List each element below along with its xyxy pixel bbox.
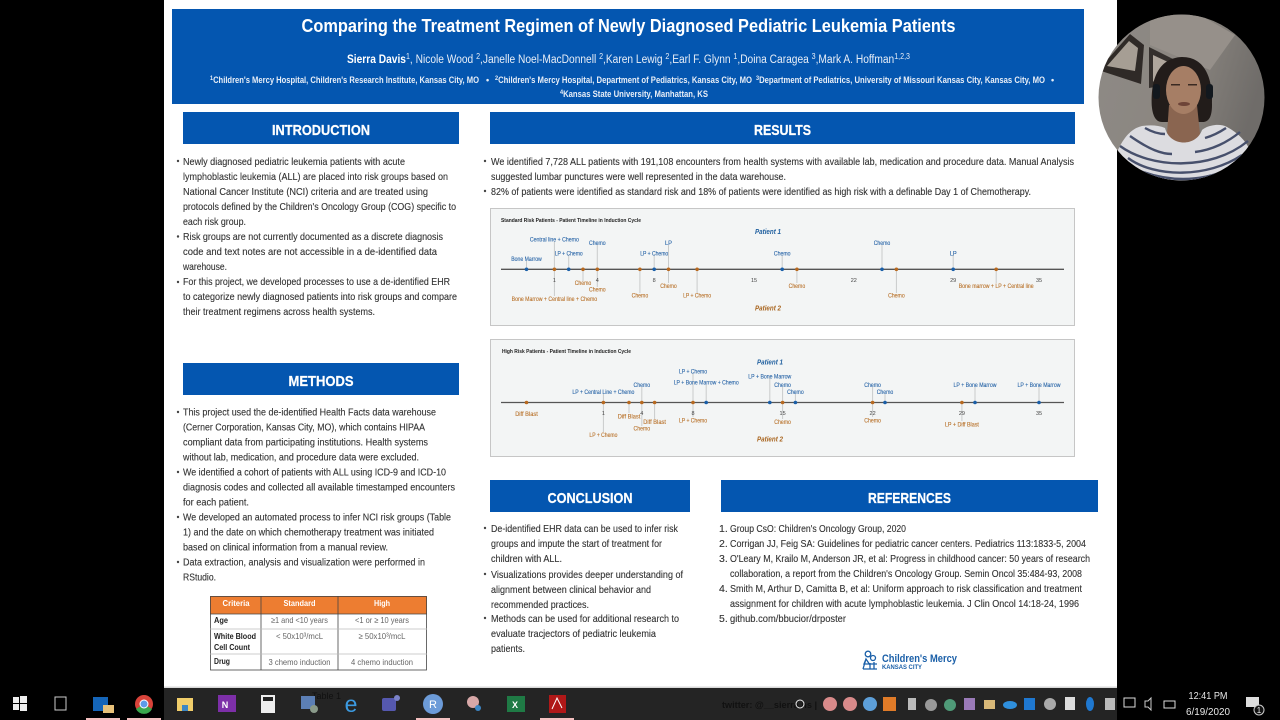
- introduction text: warehouse.: [182, 261, 227, 273]
- chart: high risk patient timeline: Chemo: [634, 427, 651, 433]
- authors: Sierra Davis: [347, 54, 406, 66]
- chart: standard risk patient timeline: LP + Chemo: [683, 294, 712, 300]
- heading: introduction: [183, 112, 459, 144]
- authors: ,Doina Caragea: [737, 54, 812, 66]
- chart: high risk patient timeline: LP + Chemo: [679, 369, 708, 375]
- chart: standard risk patient timeline: Bone marrow + LP + Central line: [959, 284, 1034, 290]
- chart: high risk patient timeline: Chemo: [864, 383, 881, 389]
- panel: conclusion: [484, 480, 690, 655]
- faint underlying poster text: Table 1: [312, 691, 341, 701]
- table 1: risk criteria: White Blood: [214, 631, 256, 641]
- authors: ,Janelle Noel-MacDonnell: [480, 54, 599, 66]
- authors: ,Karen Lewig: [603, 54, 665, 66]
- icon: internet explorer: e: [345, 691, 357, 717]
- introduction text: code and text notes are not accessible in a de-identified data: [183, 246, 437, 258]
- icon: chrome: [135, 695, 153, 714]
- title banner: [172, 9, 1084, 104]
- conclusion text: children with ALL.: [491, 553, 562, 565]
- chart: high risk patient timeline: 8: [691, 411, 695, 417]
- icon: onenote: [218, 695, 236, 712]
- chart: high risk patient timeline: Diff Blast: [618, 414, 641, 420]
- chart: standard risk patient timeline: LP: [950, 252, 957, 258]
- icon: snipping tool: [467, 696, 481, 711]
- table 1: risk criteria: High: [374, 598, 390, 608]
- chart: standard risk patient timeline: LP: [665, 241, 672, 247]
- conclusion text: De-identified EHR data can be used to infer risk: [491, 523, 679, 535]
- icon: calculator: [261, 695, 275, 713]
- chart: standard risk patient timeline: Standard Risk Patients - Patient Timeline in Induction Cycle: [501, 218, 641, 224]
- chart: standard risk patient timeline: Chemo: [589, 288, 606, 294]
- references list: 2.: [719, 538, 728, 550]
- authors: ,Earl F. Glynn: [669, 54, 733, 66]
- methods text: based on clinical information from a manual review.: [183, 542, 388, 554]
- references list: 1.: [719, 523, 728, 535]
- taskbar: [0, 686, 1280, 720]
- affiliations: Children's Mercy Hospital, Children's Research Institute, Kansas City, MO: [213, 75, 479, 85]
- references list: 5.: [719, 613, 728, 625]
- references list: github.com/bbucior/drposter: [730, 613, 846, 625]
- methods text: without lab, medication, and procedure data were excluded.: [182, 452, 419, 464]
- icon: remote desktop: [301, 696, 318, 713]
- heading: results: RESULTS: [754, 122, 811, 139]
- poster background: [164, 0, 1117, 688]
- panel: references: [719, 480, 1098, 625]
- methods text: 1) and the date on which chemotherapy treatment was initiated: [183, 526, 434, 538]
- chart: standard risk patient timeline: [490, 208, 1074, 326]
- chart: standard risk patient timeline: 29: [950, 278, 956, 284]
- chart: high risk patient timeline: High Risk Patients - Patient Timeline in Induction Cycle: [502, 349, 631, 355]
- authors: 1: [733, 52, 738, 61]
- icon: excel: X: [512, 700, 518, 710]
- affiliations: •: [486, 75, 489, 85]
- table 1: risk criteria: Age: [214, 615, 228, 625]
- affiliations: Children's Mercy Hospital, Department of Pediatrics, Kansas City, MO: [498, 75, 752, 85]
- logo: Children's Mercy: KANSAS CITY: [882, 665, 922, 671]
- introduction text: For this project, we developed processes to use a de-identified EHR: [183, 276, 450, 288]
- table 1: risk criteria: Criteria: [222, 598, 250, 608]
- chart: high risk patient timeline: Chemo: [877, 390, 894, 396]
- references list: O'Leary M, Krailo M, Anderson JR, et al: Progress in childhood cancer: 50 years of research: [730, 553, 1090, 565]
- chart: standard risk patient timeline: Central line + Chemo: [530, 237, 579, 243]
- conclusion text: patients.: [491, 643, 525, 655]
- chart: high risk patient timeline: 22: [870, 411, 876, 417]
- chart: high risk patient timeline: Chemo: [774, 383, 791, 389]
- panel: introduction: [177, 112, 459, 318]
- authors: 1,2,3: [894, 52, 910, 61]
- icon: acrobat: [549, 695, 566, 713]
- conclusion text: recommended practices.: [491, 599, 589, 611]
- icon: R: [423, 694, 443, 714]
- chart: high risk patient timeline: LP + Bone Marrow: [954, 383, 997, 389]
- chart: standard risk patient timeline: LP + Chemo: [640, 252, 669, 258]
- clock: [1186, 690, 1230, 718]
- heading: methods: METHODS: [288, 373, 354, 390]
- chart: standard risk patient timeline: Chemo: [888, 294, 905, 300]
- chart: high risk patient timeline: LP + Central Line + Chemo: [572, 390, 635, 396]
- affiliations: 3: [756, 75, 759, 82]
- methods text: compliant data from participating institutions. Health systems: [183, 436, 428, 448]
- methods text: diagnosis codes and collected all available timestamped encounters: [183, 482, 455, 494]
- system tray icons: [796, 697, 1175, 711]
- chart: standard risk patient timeline: Bone Marrow: [511, 257, 542, 263]
- affiliations: •: [1051, 75, 1054, 85]
- chart: standard risk patient timeline: Chemo: [589, 241, 606, 247]
- icon: notifications: 1: [1257, 706, 1262, 715]
- headphones: [1153, 84, 1160, 99]
- introduction text: each risk group.: [183, 216, 246, 228]
- table 1: risk criteria: Standard: [284, 598, 316, 608]
- chart: high risk patient timeline: Diff Blast: [643, 420, 666, 426]
- introduction text: protocols defined by the Children's Oncology Group (COG) specific to: [183, 201, 456, 213]
- references list: 4.: [719, 583, 728, 595]
- methods text: Data extraction, analysis and visualization were performed in: [183, 556, 425, 568]
- icon: excel: [507, 696, 525, 712]
- chart: standard risk patient timeline: Patient 1: [755, 229, 781, 236]
- heading: conclusion: CONCLUSION: [548, 490, 632, 507]
- affiliations: Department of Pediatrics, University of Missouri Kansas City, Kansas City, MO: [759, 75, 1045, 85]
- chart: high risk patient timeline: Diff Blast: [515, 412, 538, 418]
- introduction text: [177, 156, 457, 318]
- affiliations: Kansas State University, Manhattan, KS: [563, 89, 708, 99]
- chart: standard risk patient timeline: Chemo: [660, 284, 677, 290]
- authors: , Nicole Wood: [410, 54, 476, 66]
- logo: Children's Mercy: [863, 651, 958, 671]
- introduction text: lymphoblastic leukemia (ALL) are placed into risk groups based on: [183, 171, 448, 183]
- chart: high risk patient timeline: 15: [780, 411, 786, 417]
- table 1: risk criteria: ≥1 and <10 years: [271, 615, 328, 625]
- chart: high risk patient timeline: LP + Chemo: [679, 418, 708, 424]
- chart: standard risk patient timeline: Bone Marrow + Central line + Chemo: [512, 297, 598, 303]
- introduction text: to categorize newly diagnosed patients into risk groups and compare: [183, 291, 457, 303]
- chart: standard risk patient timeline: Chemo: [874, 241, 891, 247]
- results text: 82% of patients were identified as standard risk and 18% of patients were identified as high risk with a definable Day 1 of Chemotherapy.: [491, 186, 1031, 198]
- chart: high risk patient timeline: Chemo: [787, 390, 804, 396]
- framed certificates: [1098, 34, 1144, 84]
- clock: 6/19/2020: [1186, 706, 1230, 718]
- conclusion text: evaluate tracjectors of pediatric leukemia: [491, 628, 656, 640]
- chart: high risk patient timeline: 29: [959, 411, 965, 417]
- heading: introduction: INTRODUCTION: [272, 122, 370, 139]
- heading: references: REFERENCES: [868, 490, 951, 507]
- logo: Children's Mercy: Children's Mercy: [882, 653, 958, 665]
- references list: collaboration, a report from the Children's Oncology Group. Semin Oncol 35:484-93, 2008: [730, 568, 1082, 580]
- chart: high risk patient timeline: Patient 1: [757, 360, 783, 367]
- heading: results: [490, 112, 1075, 144]
- affiliations: 2: [495, 75, 498, 82]
- chart: standard risk patient timeline: Patient 2: [755, 306, 781, 312]
- chart: high risk patient timeline: LP + Chemo: [589, 433, 618, 439]
- chart: standard risk patient timeline: 22: [851, 278, 857, 284]
- active app underlines: [86, 718, 574, 720]
- table 1: risk criteria: ≥ 50x10³/mcL: [358, 631, 406, 641]
- chart: standard risk patient timeline: 8: [653, 278, 656, 284]
- chart: high risk patient timeline: 1: [602, 411, 605, 417]
- conclusion text: Visualizations provides deeper understanding of: [491, 569, 683, 581]
- affiliations: 4: [560, 89, 563, 96]
- chart: high risk patient timeline: LP + Bone Marrow: [748, 374, 792, 380]
- introduction text: National Cancer Institute (NCI) criteria and are treated using: [183, 186, 428, 198]
- icon: task view: [55, 697, 66, 710]
- results text: suggested lumbar punctures were well represented in the data warehouse.: [491, 171, 786, 183]
- clock: 12:41 PM: [1188, 690, 1228, 702]
- title: Comparing the Treatment Regimen of Newly Diagnosed Pediatric Leukemia Patients: [302, 16, 956, 36]
- affiliations: [210, 75, 1054, 99]
- chart: high risk patient timeline: LP + Bone Marrow: [1018, 383, 1061, 389]
- references list: Group CsO: Children's Oncology Group, 2020: [730, 523, 906, 535]
- results text: [484, 156, 1074, 198]
- chart: standard risk patient timeline: Chemo: [774, 252, 791, 258]
- icon: teams: [382, 695, 400, 711]
- methods text: We identified a cohort of patients with ALL using ICD-9 and ICD-10: [183, 466, 446, 478]
- methods text: [177, 406, 455, 584]
- heading: references: [721, 480, 1098, 512]
- icon: logo figures: [863, 651, 877, 669]
- authors: 2: [665, 52, 670, 61]
- references list: 3.: [719, 553, 728, 565]
- affiliations: 1: [210, 75, 213, 82]
- references list: assignment for children with acute lymphoblastic leukemia. J Clin Oncol 14:18-24, 1996: [730, 598, 1079, 610]
- chart: high risk patient timeline: [490, 340, 1074, 456]
- face: [1166, 66, 1201, 114]
- icon: windows start: [13, 696, 27, 711]
- results text: We identified 7,728 ALL patients with 191,108 encounters from health systems with available lab, medication and procedure data. Manual Analysis: [491, 156, 1074, 168]
- chart: high risk patient timeline: LP + Bone Marrow + Chemo: [674, 381, 739, 387]
- chart: standard risk patient timeline: Chemo: [632, 294, 649, 300]
- striped shirt: [1118, 125, 1250, 185]
- methods text: This project used the de-identified Health Facts data warehouse: [183, 406, 436, 418]
- introduction text: Newly diagnosed pediatric leukemia patients with acute: [183, 156, 405, 168]
- conclusion text: groups and impute the start of treatment for: [491, 538, 662, 550]
- authors: 2: [599, 52, 604, 61]
- icon: notifications: [1246, 697, 1264, 715]
- chart: standard risk patient timeline: 4: [596, 278, 599, 284]
- authors: 1: [406, 52, 410, 61]
- chart: standard risk patient timeline: Chemo: [789, 284, 806, 290]
- introduction text: Risk groups are not currently documented as a discrete diagnosis: [183, 231, 443, 243]
- conclusion text: alignment between clinical behavior and: [491, 584, 651, 596]
- methods text: We developed an automated process to infer NCI risk groups (Table: [183, 512, 451, 524]
- icon: onenote: N: [222, 700, 228, 710]
- conclusion text: Methods can be used for additional research to: [491, 613, 679, 625]
- chart: high risk patient timeline: Patient 2: [757, 436, 783, 443]
- chart: standard risk patient timeline: Chemo: [575, 281, 592, 287]
- authors: 2: [476, 52, 481, 61]
- table 1: risk criteria: [210, 596, 427, 670]
- chart: high risk patient timeline: Chemo: [864, 418, 881, 424]
- conclusion text: [484, 523, 683, 655]
- chart: standard risk patient timeline: 1: [553, 278, 556, 284]
- icon: outlook: [93, 697, 114, 713]
- panel: results: [484, 112, 1075, 456]
- references list: Smith M, Arthur D, Camitta B, et al: Uniform approach to risk classification and treatment: [730, 583, 1082, 595]
- authors: 3: [812, 52, 816, 61]
- table 1: risk criteria: 4 chemo induction: [351, 657, 413, 667]
- table 1: risk criteria: Cell Count: [214, 642, 250, 652]
- table 1: risk criteria: <1 or ≥ 10 years: [355, 615, 409, 625]
- introduction text: their treatment regimens across health systems.: [183, 306, 375, 318]
- icon: file explorer: [177, 698, 193, 711]
- methods text: (Cerner Corporation, Kansas City, MO), which contains HIPAA: [183, 422, 425, 434]
- methods text: for each patient.: [183, 496, 249, 508]
- authors: ,Mark A. Hoffman: [816, 54, 894, 66]
- chart: high risk patient timeline: 4: [640, 411, 643, 417]
- references list: [719, 523, 1090, 625]
- hair: [1152, 57, 1212, 122]
- table 1: risk criteria: Drug: [214, 656, 230, 666]
- table 1: risk criteria: 3 chemo induction: [268, 657, 331, 667]
- chart: high risk patient timeline: Chemo: [774, 420, 791, 426]
- taskbar: twitter: @__sierra.ns |: [722, 700, 817, 710]
- chart: high risk patient timeline: 35: [1036, 411, 1042, 417]
- chart: high risk patient timeline: Chemo: [634, 383, 651, 389]
- chart: high risk patient timeline: LP + Diff Blast: [945, 422, 979, 428]
- references list: Corrigan JJ, Feig SA: Guidelines for pediatric cancer centers. Pediatrics 113:1833-5, 2004: [730, 538, 1086, 550]
- table 1: risk criteria: < 50x10³/mcL: [276, 631, 323, 641]
- panel: methods: [177, 363, 459, 670]
- methods text: RStudio.: [183, 572, 216, 584]
- heading: conclusion: [490, 480, 690, 512]
- webcam: presenter: [1098, 14, 1266, 185]
- heading: methods: [183, 363, 459, 395]
- icon: R: R: [429, 699, 437, 711]
- chart: standard risk patient timeline: 35: [1036, 278, 1042, 284]
- chart: standard risk patient timeline: 15: [751, 278, 757, 284]
- neck: [1167, 105, 1200, 143]
- chart: standard risk patient timeline: LP + Chemo: [555, 252, 583, 258]
